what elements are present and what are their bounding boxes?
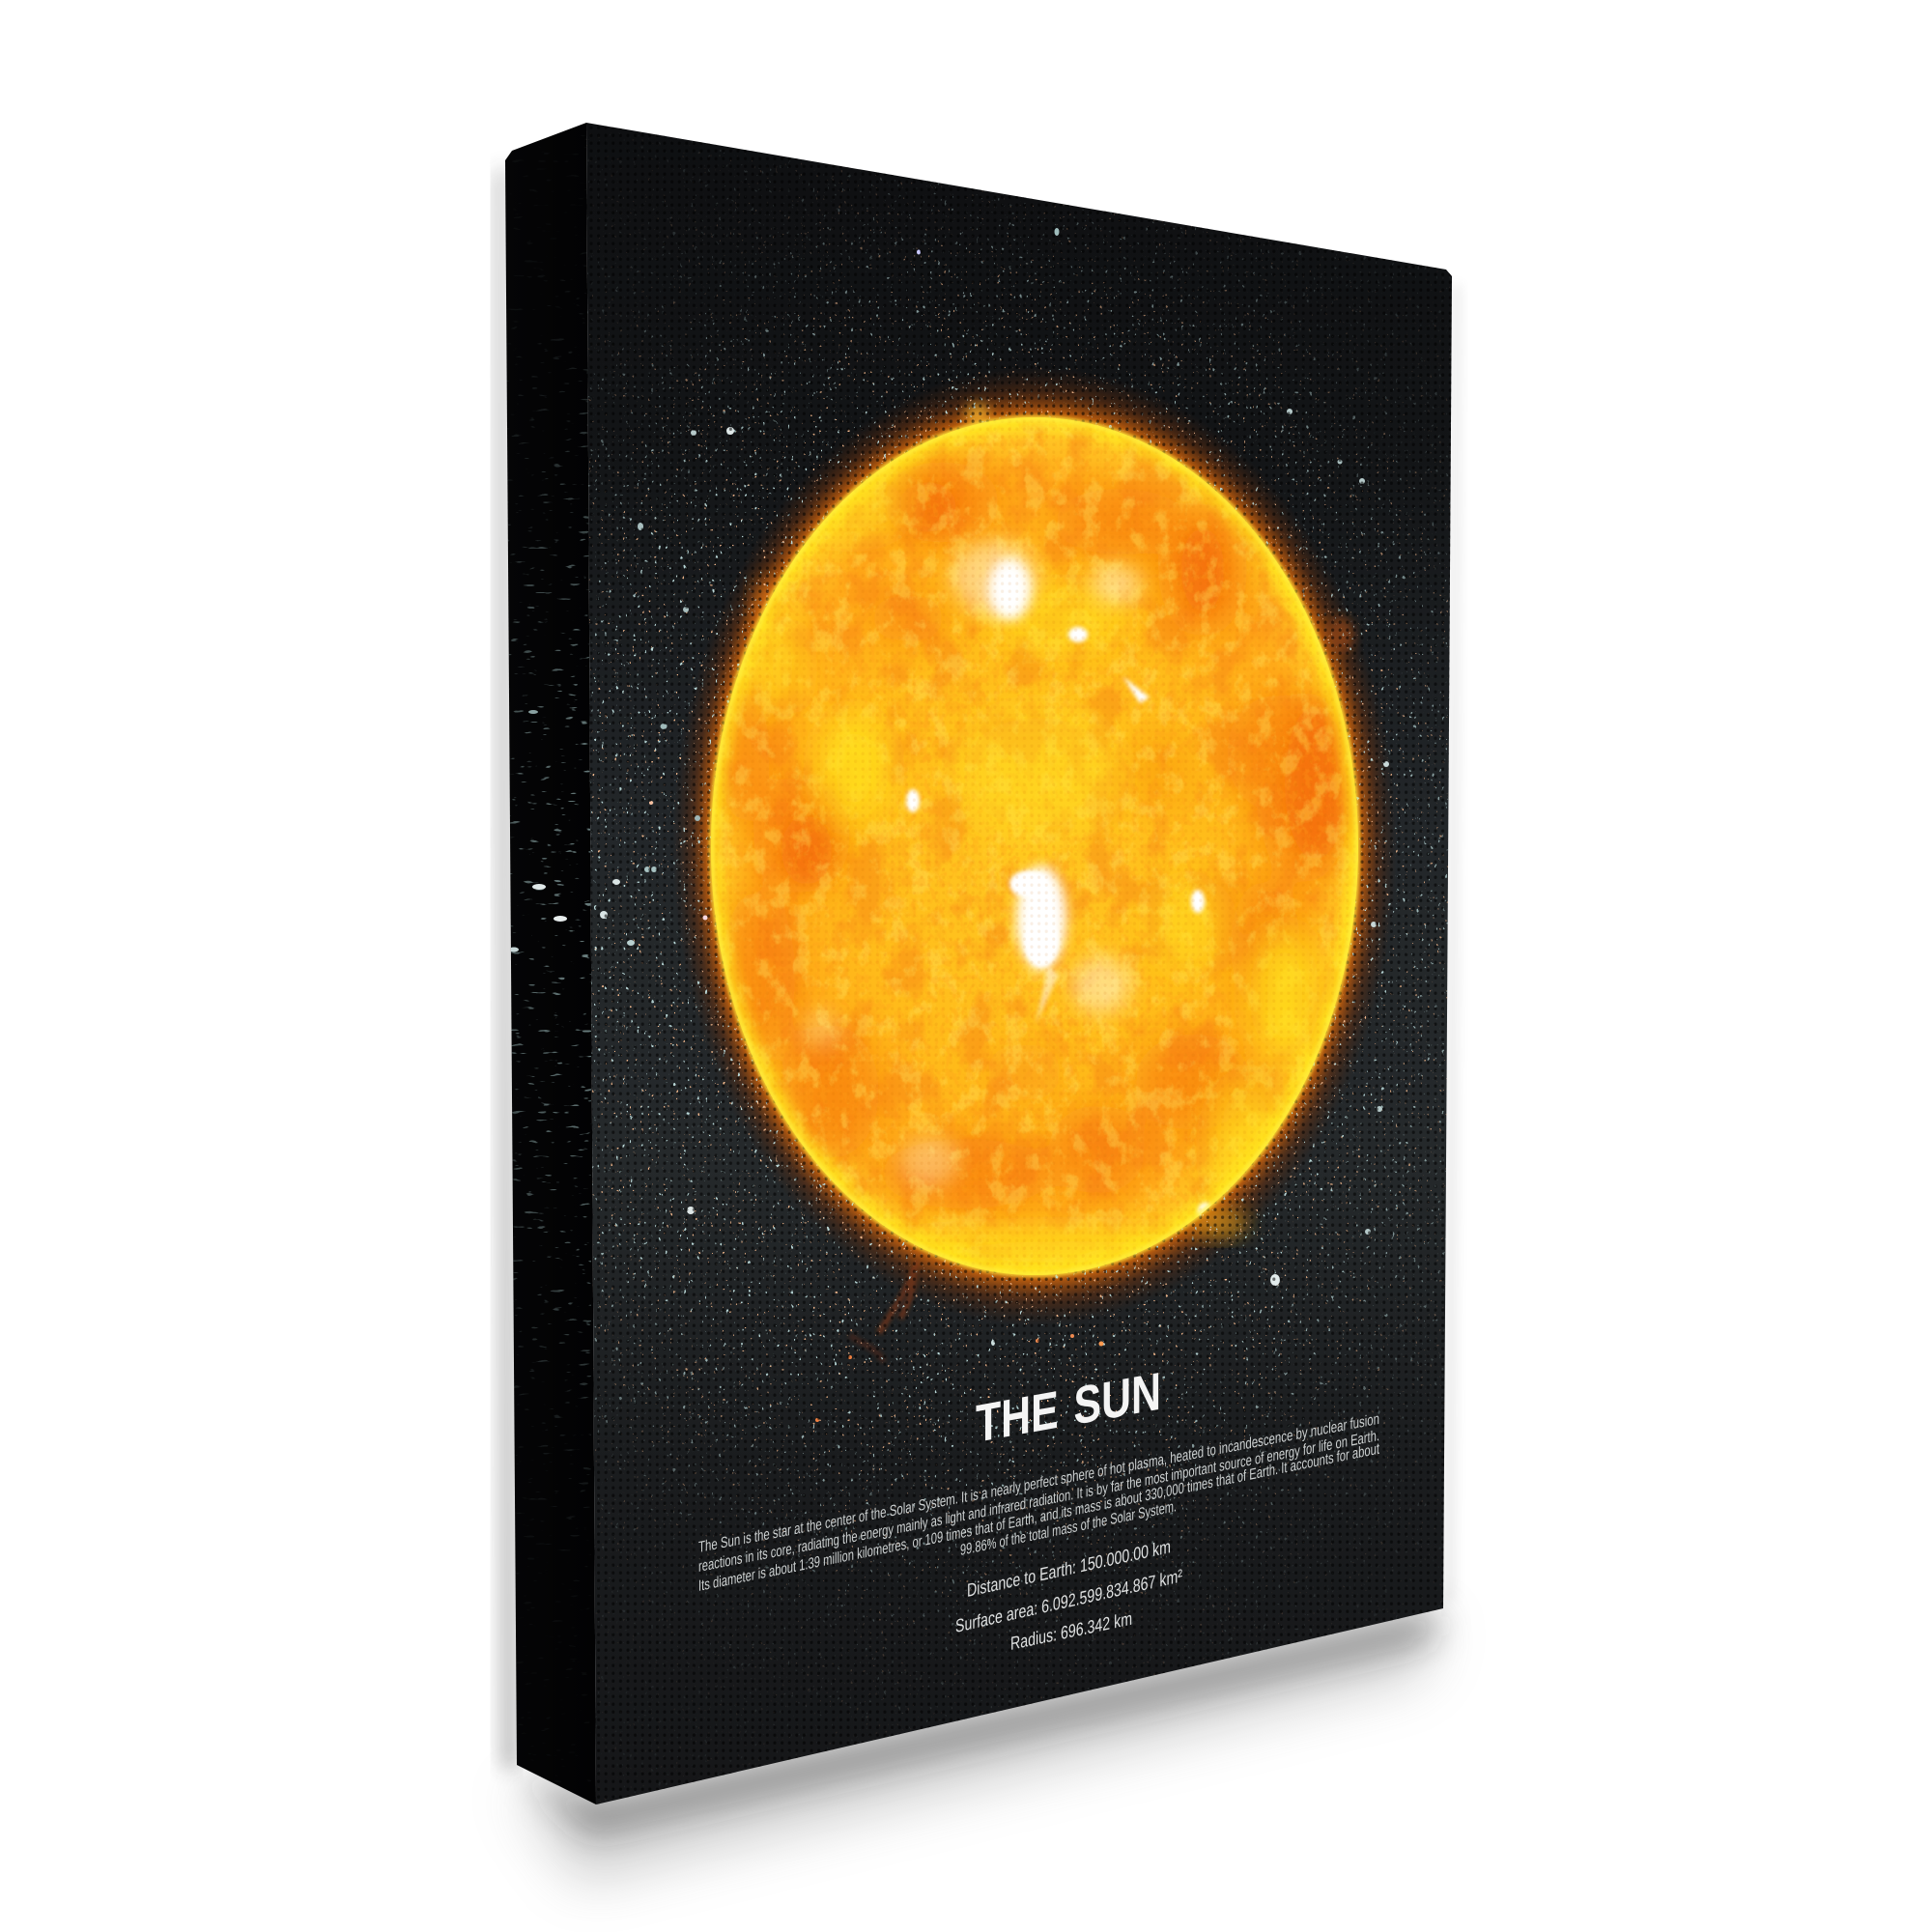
facts text block: Radius: 696.342 km <box>1010 1609 1132 1655</box>
description text block: The Sun is the star at the center of the Solar System. It is a nearly perfect sphere of hot plasma, heated to incandescence by nuclear fusion <box>698 1410 1379 1556</box>
description text block: 99.86% of the total mass of the Solar System. <box>960 1497 1177 1559</box>
description text block: Its diameter is about 1.39 million kilometres, or 109 times that of Earth, and its mass is about 330,000 times that of Earth. It accounts for about <box>698 1440 1379 1595</box>
canvas product scene <box>491 123 1462 1900</box>
sun <box>705 411 1362 1280</box>
pale plasma patches <box>802 541 1141 1186</box>
orange surface blotches <box>719 462 1352 1208</box>
sun rim <box>712 418 1357 1274</box>
canvas weave texture <box>580 116 1459 1816</box>
panel: canvas front face <box>580 116 1459 1816</box>
sun corona glow <box>672 366 1397 1362</box>
title: THE SUN <box>976 1361 1161 1454</box>
panel: canvas side face <box>502 123 596 1804</box>
white hot flares <box>906 558 1213 1220</box>
deep orange hot zones <box>781 482 1347 885</box>
limb brightening <box>715 421 1354 1271</box>
cast shadows <box>497 164 1461 1884</box>
star field <box>580 116 1459 1816</box>
bright yellow regions <box>759 464 1320 1275</box>
bright stars <box>600 228 1389 1422</box>
facts text block: Surface area: 6.092.599.834.867 km² <box>955 1566 1182 1637</box>
facts text block: Distance to Earth: 150.000.00 km <box>967 1537 1171 1602</box>
description text block: reactions in its core, radiating the energy mainly as light and infrared radiation. It is by far the most important source of energy for life on Earth. <box>698 1427 1379 1576</box>
facts text block <box>955 1537 1182 1655</box>
solar mottling <box>705 411 1362 1280</box>
description text block <box>698 1410 1379 1595</box>
